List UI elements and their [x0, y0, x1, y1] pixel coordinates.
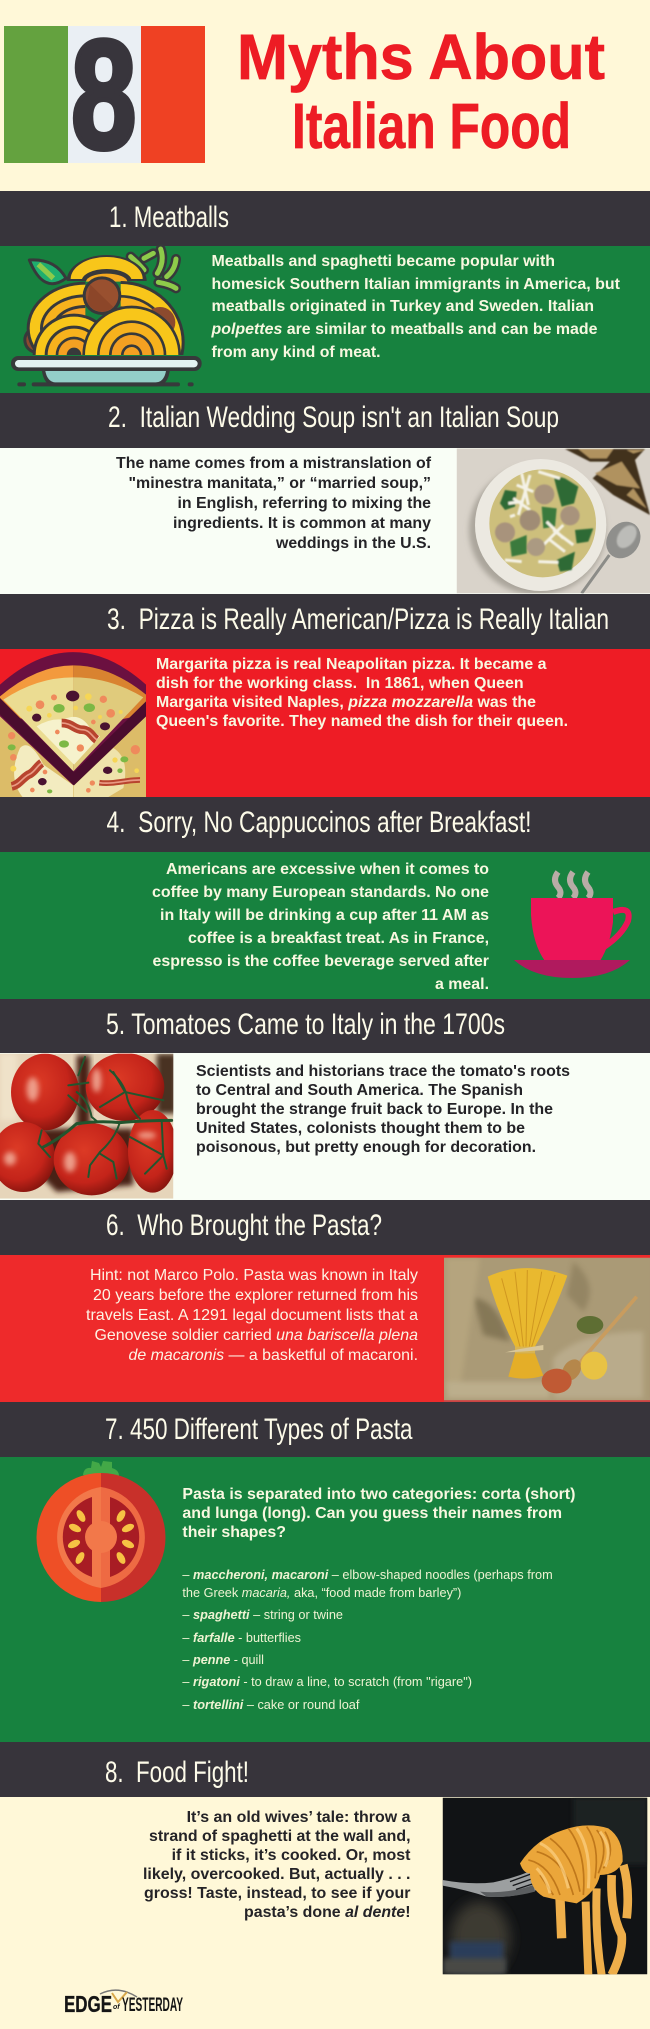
list of pasta names: – rigatoni - to draw a line, to scratch (from "rigare"): [182, 1674, 472, 1689]
icon: coffee cup: [514, 872, 630, 978]
text block: [196, 1063, 570, 1156]
text block: travels East. A 1291 legal document lists that a: [86, 1307, 418, 1324]
header band: [0, 797, 650, 852]
text block: strand of spaghetti at the wall and,: [149, 1828, 410, 1845]
title: [237, 21, 605, 162]
text block: and lunga (long). Can you guess their names from: [182, 1505, 562, 1522]
panel: myth 5 tomatoes: [0, 999, 650, 1200]
text block: ingredients. It is common at many: [173, 515, 431, 532]
body band: [0, 1053, 650, 1200]
heading: 6. Who Brought the Pasta?: [106, 1209, 382, 1242]
text block: brought the strange fruit back to Europe. In the: [196, 1101, 553, 1118]
heading: 5. Tomatoes Came to Italy in the 1700s: [106, 1008, 505, 1041]
header band: [0, 1742, 650, 1797]
text block: in Italy will be drinking a cup after 11 AM as: [160, 907, 489, 924]
list of pasta names: – penne - quill: [182, 1652, 264, 1667]
text block: [152, 861, 489, 993]
list of pasta names: the Greek macaria, aka, “food made from barley”): [182, 1585, 461, 1600]
body band: [0, 246, 650, 393]
text block: poisonous, but pretty enough for decoration.: [196, 1139, 536, 1156]
text block: United States, colonists thought them to be: [196, 1120, 525, 1137]
text block: de macaronis — a basketful of macaroni.: [128, 1347, 418, 1364]
logo: Edge of Yesterday: YESTERDAY: [122, 1995, 183, 2016]
list of pasta names: – farfalle - butterflies: [182, 1630, 301, 1645]
body band: [0, 1457, 650, 1742]
header: flag and title: [4, 8, 605, 182]
icon: tomato slice: [37, 1461, 166, 1602]
text block: [116, 455, 432, 552]
photo: pasta on a fork: [443, 1798, 647, 1975]
text block: in English, referring to mixing the: [178, 495, 431, 512]
text block: [211, 253, 621, 361]
text block: dish for the working class. In 1861, when Queen: [156, 675, 524, 692]
heading: 8. Food Fight!: [105, 1756, 249, 1789]
text block: homesick Southern Italian immigrants in America, but: [212, 276, 621, 293]
panel: myth 7 pasta types: [0, 1402, 650, 1742]
text block: The name comes from a mistranslation of: [116, 455, 432, 472]
text block: [143, 1809, 411, 1921]
list of pasta names: – maccheroni, macaroni – elbow-shaped noodles (perhaps from: [182, 1567, 553, 1582]
header band: [0, 191, 650, 246]
body band: [0, 852, 650, 999]
list of pasta names: – spaghetti – string or twine: [182, 1607, 343, 1622]
photo: spaghetti bundle on burlap: [444, 1258, 650, 1402]
text block: [182, 1486, 575, 1541]
heading: 7. 450 Different Types of Pasta: [105, 1413, 413, 1446]
body band: [0, 1255, 650, 1402]
text block: meatballs originated in Turkey and Sweden. Italian: [212, 298, 594, 315]
text block: their shapes?: [182, 1524, 286, 1541]
title: Myths About: [237, 21, 605, 93]
text block: [86, 1267, 418, 1364]
text block: to Central and South America. The Spanish: [196, 1082, 523, 1099]
text block: It’s an old wives’ tale: throw a: [187, 1809, 411, 1826]
title: Italian Food: [292, 90, 571, 162]
text block: Genovese soldier carried una bariscella plena: [94, 1327, 418, 1344]
panel: myth 2 wedding soup: [0, 393, 650, 595]
text block: gross! Taste, instead, to see if your: [144, 1885, 410, 1902]
text block: Scientists and historians trace the tomato's roots: [196, 1063, 570, 1080]
text block: [156, 656, 568, 730]
panel: myth 4 cappuccino: [0, 797, 650, 999]
text block: Americans are excessive when it comes to: [166, 861, 489, 878]
header band: [0, 594, 650, 649]
icon: spaghetti and meatballs plate: [11, 249, 202, 404]
header band: [0, 1402, 650, 1457]
text block: coffee by many European standards. No one: [152, 884, 489, 901]
list of pasta names: [182, 1567, 553, 1712]
icon: Italian flag with number 8: 8: [71, 8, 137, 182]
text block: "minestra manitata,” or “married soup,”: [128, 475, 431, 492]
heading: 1. Meatballs: [109, 201, 229, 234]
text block: Meatballs and spaghetti became popular with: [212, 253, 555, 270]
text block: Queen's favorite. They named the dish for their queen.: [156, 713, 568, 730]
panel: myth 6 pasta origin: [0, 1200, 650, 1402]
text block: Margarita visited Naples, pizza mozzarella was the: [156, 694, 536, 711]
text block: polpettes are similar to meatballs and can be made: [211, 321, 598, 338]
list of pasta names: – tortellini – cake or round loaf: [182, 1697, 360, 1712]
panel: myth 1 meatballs: [0, 191, 650, 404]
text block: from any kind of meat.: [212, 344, 380, 361]
text block: Hint: not Marco Polo. Pasta was known in Italy: [90, 1267, 418, 1284]
text block: a meal.: [435, 976, 489, 993]
header band: [0, 999, 650, 1053]
text block: 20 years before the explorer returned from his: [93, 1287, 418, 1304]
text block: coffee is a breakfast treat. As in France,: [188, 930, 489, 947]
text block: Pasta is separated into two categories: corta (short): [182, 1486, 575, 1503]
icon: Italian flag with number 8: [4, 8, 205, 182]
text block: weddings in the U.S.: [275, 535, 431, 552]
photo: soup bowl: [457, 448, 650, 595]
panel: myth 8 food fight: [0, 1742, 650, 1975]
panel: myth 3 pizza: [0, 594, 650, 798]
header band: [0, 393, 650, 448]
text block: espresso is the coffee beverage served after: [152, 953, 489, 970]
logo: Edge of Yesterday: [64, 1990, 183, 2017]
logo: Edge of Yesterday: of: [113, 2004, 120, 2011]
text block: pasta’s done al dente!: [244, 1904, 410, 1921]
text block: likely, overcooked. But, actually . . .: [143, 1866, 410, 1883]
photo: tomatoes on the vine: [0, 1053, 177, 1199]
text block: Margarita pizza is real Neapolitan pizza. It became a: [156, 656, 547, 673]
body band: [0, 448, 650, 594]
body band: [0, 649, 650, 797]
text block: if it sticks, it’s cooked. Or, most: [172, 1847, 411, 1864]
logo: Edge of Yesterday: EDGE: [64, 1991, 112, 2017]
heading: 4. Sorry, No Cappuccinos after Breakfast!: [106, 806, 532, 839]
icon: pizza slices: [0, 652, 146, 798]
header band: [0, 1200, 650, 1255]
